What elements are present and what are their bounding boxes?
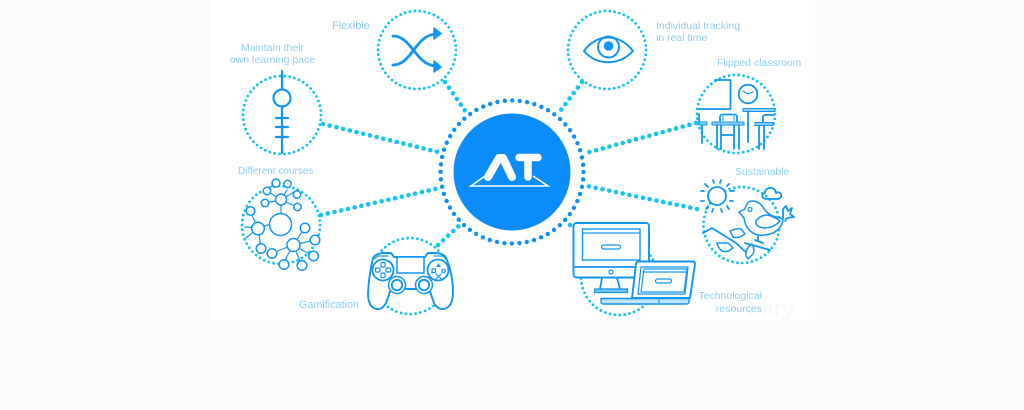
icon: bird on branch (703, 201, 794, 259)
label: technological resources: Technological (698, 290, 762, 302)
icon: cloud (762, 188, 781, 199)
label: individual tracking: Individual tracking (656, 20, 740, 32)
icon: eye (584, 36, 633, 62)
icon: laptop (601, 262, 695, 304)
label: technological resources: resources (716, 303, 762, 315)
panel: learning pace (230, 42, 321, 154)
whiteboard (699, 80, 730, 109)
label: learning pace: own learning pace (230, 54, 315, 66)
icon: shuffle arrows (393, 28, 441, 72)
panel: technological resources (574, 223, 795, 321)
label: different courses: Different courses (238, 166, 313, 177)
icon: classroom (699, 80, 775, 149)
left chair (699, 114, 707, 143)
panel: sustainable (701, 167, 794, 263)
central AT logo (440, 100, 584, 244)
icon: desktop monitor (574, 223, 649, 292)
panel: individual tracking (568, 11, 740, 89)
watermark: bary (748, 296, 795, 321)
label: gamification: Gamification (299, 299, 359, 311)
label: flexible: Flexible (332, 20, 370, 32)
icon: node network (245, 179, 320, 270)
right chair (755, 115, 774, 149)
d-pad (376, 262, 390, 278)
centre chair and table (712, 114, 744, 149)
icon: slider (274, 71, 290, 153)
icon: game controller (368, 253, 453, 309)
panel: flipped classroom (697, 58, 801, 153)
icon: sun (701, 180, 734, 212)
panel: different courses (238, 166, 320, 270)
connectors (321, 82, 697, 245)
label: sustainable: Sustainable (735, 167, 790, 178)
label: individual tracking: in real time (656, 32, 708, 44)
label: learning pace: Maintain their (241, 42, 304, 54)
label: flipped classroom: Flipped classroom (717, 58, 801, 69)
panel: gamification (299, 238, 453, 314)
panel: flexible (332, 11, 456, 89)
wall clock (739, 85, 757, 103)
face buttons (432, 264, 445, 279)
teacher desk (743, 108, 775, 112)
